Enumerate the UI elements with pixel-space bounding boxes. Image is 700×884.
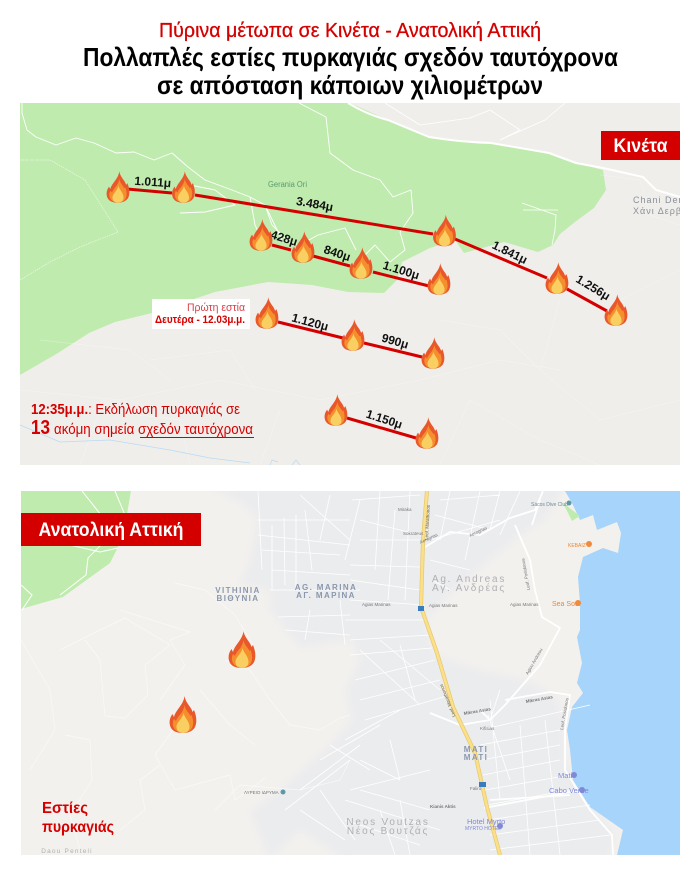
road shields: [418, 606, 486, 787]
distance labels: 1.011μ: [134, 174, 172, 190]
street labels: Leof. Posidonos: [520, 557, 531, 591]
note: fire outbreaks: [42, 800, 114, 836]
roads: [20, 103, 680, 465]
place labels: ΜΑΤΙ: [464, 753, 488, 762]
point of interest labels: KEBAIZ: [568, 543, 586, 549]
label: East Attica: [21, 513, 201, 546]
distance lines: [127, 189, 607, 438]
street labels: Kifisias: [480, 726, 495, 731]
main title: Πολλαπλές εστίες πυρκαγιάς σχεδόν ταυτόχρονα: [83, 42, 618, 72]
label: Kineta: Κινέτα: [614, 136, 668, 157]
distance labels: 1.100μ: [381, 258, 421, 282]
point of interest labels: Hotel Myrto: [467, 817, 505, 826]
callout: first fire: [152, 299, 250, 329]
street labels: Leof. Marathonos: [424, 504, 431, 540]
callout: first fire: Δευτέρα - 12.03μ.μ.: [155, 314, 245, 326]
callout: first fire: Πρώτη εστία: [187, 302, 246, 314]
distance labels: 840μ: [322, 242, 352, 264]
note: 12:35 outbreak: ακόμη σημεία σχεδόν ταυτόχρονα: [54, 422, 253, 438]
map label: Chani Derveni: Χάνι Δερβένι: [633, 206, 696, 216]
place labels: AG. MARINA: [295, 583, 357, 592]
street labels: [362, 504, 570, 809]
point of interest labels: Cabo Verde: [549, 786, 589, 795]
distance labels: 428μ: [269, 227, 299, 249]
distance labels: [134, 174, 613, 432]
hill roads: [21, 583, 350, 850]
note: 12:35 outbreak: 13: [31, 417, 50, 439]
point of interest labels: Sea Soul: [552, 601, 581, 608]
place labels: Αγ. Ανδρέας: [432, 582, 506, 594]
street labels: Aerogrias: [419, 532, 439, 545]
place labels: ΑΓ. ΜΑΡΙΝΑ: [296, 591, 356, 600]
street labels: Sokrateus: [403, 531, 424, 536]
main title: [83, 42, 618, 100]
street labels: Leof. Marathonos: [438, 683, 456, 718]
place labels: ΒΙΘΥΝΙΑ: [217, 594, 259, 603]
urban area: [205, 485, 615, 860]
distance labels: 3.484μ: [295, 194, 334, 214]
map label: Chani Derveni: [633, 196, 680, 216]
map label: Gerania Ori: Gerania Ori: [268, 180, 307, 189]
label: East Attica: Ανατολική Αττική: [38, 520, 184, 541]
place labels: Νέος Βουτζάς: [347, 825, 429, 837]
note: fire outbreaks: πυρκαγιάς: [42, 819, 114, 836]
distance labels: 1.256μ: [573, 272, 613, 303]
point of interest labels: Mati: [558, 771, 573, 780]
forest area: [21, 491, 131, 609]
water: [565, 491, 680, 855]
point of interest labels: [244, 500, 592, 832]
panel: Kineta map: [20, 103, 700, 465]
place labels: VITHINIA: [215, 586, 261, 595]
green park: [563, 503, 580, 521]
note: fire outbreaks: Εστίες: [42, 800, 88, 817]
white main roads: [425, 491, 613, 855]
note: 12:35 outbreak: [31, 402, 254, 439]
urban streets: [257, 491, 610, 855]
street labels: Agiou Andreou: [525, 647, 544, 676]
street labels: Leof. Posidonos: [559, 697, 570, 730]
distance labels: 990μ: [380, 331, 410, 352]
place labels: Ag. Andreas: [432, 574, 506, 585]
distance labels: 1.120μ: [290, 311, 330, 334]
Leof. Marathonos highway: [421, 491, 500, 855]
note: 12:35 outbreak: 12:35μ.μ.: Εκδήλωση πυρκαγιάς σε: [31, 402, 240, 418]
subtitle: Πύρινα μέτωπα σε Κινέτα - Ανατολική Αττική: [159, 20, 541, 42]
fire icons: East Attica: [170, 631, 255, 733]
point of interest labels: MYRTO HOTEL: [465, 826, 501, 832]
street labels: Faliro: [470, 786, 482, 791]
point of interest labels: ΛΥΡΕΙΟ ΙΔΡΥΜΑ: [244, 790, 279, 795]
place labels: Daou Penteli: [41, 848, 93, 855]
forest area: [20, 103, 606, 375]
street labels: Kianis Aktis: [430, 804, 456, 809]
place labels: Neos Voutzas: [346, 817, 430, 828]
panel: East Attica map: [21, 485, 680, 860]
distance labels: 1.150μ: [364, 407, 404, 432]
place labels: ΜΑΤΙ: [464, 745, 488, 754]
fire icons: Kineta: [107, 171, 627, 449]
street labels: Agias Marinas: [429, 603, 458, 608]
street labels: Miraka: [398, 507, 412, 512]
street labels: Agias Marinas: [362, 602, 391, 607]
distance labels: 1.841μ: [490, 238, 530, 267]
street labels: Mikras Asias: [525, 694, 554, 704]
street labels: Agias Marinas: [510, 602, 539, 607]
place labels: [41, 574, 506, 855]
street labels: Mikras Asias: [463, 706, 492, 716]
street labels: Aerogrias: [468, 525, 489, 538]
label: Kineta: [601, 131, 680, 160]
point of interest labels: Sácos Dive Club: [531, 502, 568, 508]
forest roads: [21, 491, 125, 610]
main title: σε απόσταση κάποιων χιλιομέτρων: [157, 70, 543, 100]
